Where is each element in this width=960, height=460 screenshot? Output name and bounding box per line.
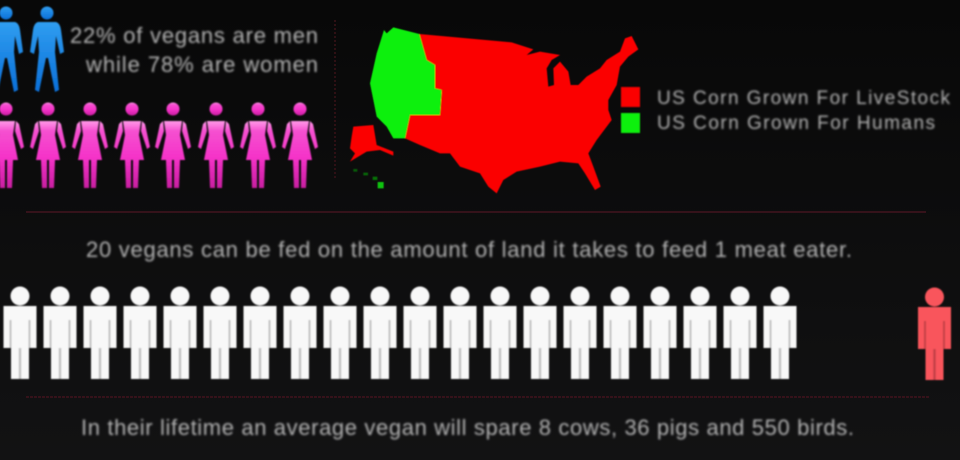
text: lifetime animals spared: In their lifetime an average vegan will spare 8 cows, 36 pigs and 550 birds. xyxy=(81,415,854,440)
legend swatch: humans xyxy=(621,113,640,133)
map region: Hawaii xyxy=(353,169,384,188)
map region: Alaska xyxy=(350,125,393,162)
legend labels: US Corn Grown For Humans xyxy=(657,113,935,134)
legend swatch: livestock xyxy=(621,87,640,107)
legend xyxy=(621,87,950,134)
icon: meat eater, red xyxy=(918,288,951,380)
legend labels xyxy=(657,88,950,134)
text: share of men and women: while 78% are women xyxy=(85,52,318,77)
map region: corn for livestock xyxy=(405,34,638,193)
icons: women, pink xyxy=(0,102,318,188)
icons: 20 vegans, white xyxy=(4,286,796,379)
icons: men, blue xyxy=(0,6,64,92)
map region: corn for humans xyxy=(370,27,442,138)
map: US corn use xyxy=(350,27,638,193)
text: land use statement: 20 vegans can be fed on the amount of land it takes to feed 1 meat eater. xyxy=(86,237,852,262)
text: share of men and women: 22% of vegans are men xyxy=(70,23,318,48)
legend labels: US Corn Grown For LiveStock xyxy=(657,88,950,109)
text: share of men and women xyxy=(70,23,318,77)
